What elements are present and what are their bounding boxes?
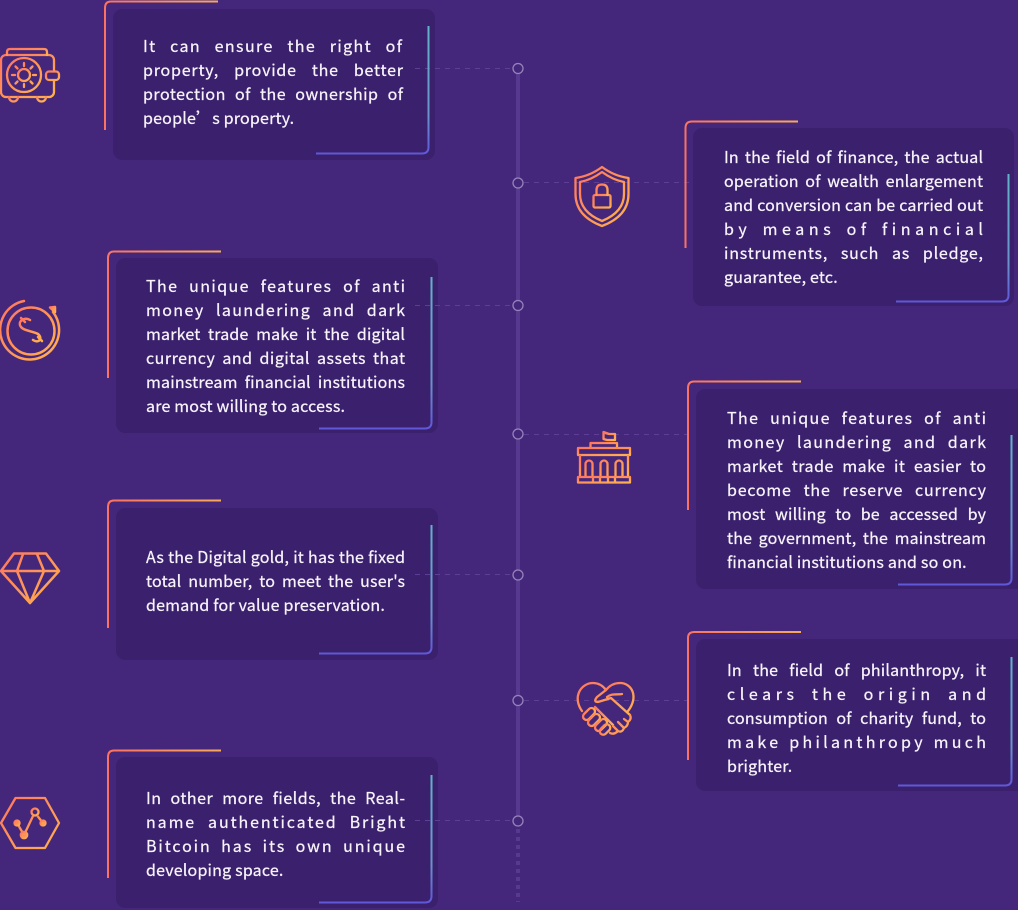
text: property rights: property, provide the better	[143, 57, 404, 81]
text: philanthropy: brighter.	[727, 753, 792, 777]
text: reserve currency: become the reserve currency	[727, 477, 987, 501]
text: reserve currency: market trade make it easier to	[727, 453, 986, 477]
text: finance: guarantee, etc.	[724, 264, 838, 288]
frame: other fields	[108, 750, 432, 902]
text: anti money laundering: currency and digital assets that	[146, 345, 406, 369]
text: anti money laundering	[146, 273, 406, 417]
panel: anti money laundering	[116, 258, 438, 433]
text: philanthropy	[727, 657, 991, 777]
icon: hexagon chart	[1, 798, 59, 848]
text: finance: and conversion can be carried out	[724, 192, 983, 216]
text: anti money laundering: market trade make it the digital	[146, 321, 405, 345]
text: other fields	[146, 785, 407, 881]
text: property rights: It can ensure the right of	[143, 33, 403, 57]
text: philanthropy: In the field of philanthropy, it	[727, 657, 986, 681]
text: digital gold: total number, to meet the user's	[146, 568, 405, 592]
text: finance: by means of financial	[724, 216, 988, 240]
text: digital gold: demand for value preservation.	[146, 592, 385, 616]
frame: anti money laundering	[108, 252, 432, 428]
text: reserve currency	[727, 405, 987, 573]
text: digital gold	[146, 544, 405, 616]
icon: dollar cycle	[0, 301, 59, 359]
text: finance: instruments, such as pledge,	[724, 240, 984, 264]
icon: diamond	[1, 554, 59, 603]
frame: finance	[686, 122, 1008, 302]
frame: reserve currency	[688, 382, 1012, 584]
text: philanthropy: make philanthropy much	[727, 729, 989, 753]
text: other fields: developing space.	[146, 857, 284, 881]
text: finance: operation of wealth enlargement	[724, 168, 983, 192]
text: finance: In the field of finance, the actual	[724, 144, 983, 168]
icon: shield lock	[576, 167, 628, 226]
frame: digital gold	[108, 500, 432, 654]
text: reserve currency: The unique features of anti	[727, 405, 987, 429]
text: anti money laundering: money laundering and dark	[146, 297, 406, 321]
text: other fields: name authenticated Bright	[146, 809, 407, 833]
icon: government building	[578, 430, 630, 482]
icon: handshake heart	[578, 683, 633, 736]
text: property rights: people’s property.	[143, 105, 294, 129]
text: reserve currency: most willing to be accessed by	[727, 501, 986, 525]
text: other fields: Bitcoin has its own unique	[146, 833, 407, 857]
panel: other fields	[116, 757, 438, 908]
text: reserve currency: financial institutions and so on.	[727, 549, 967, 573]
icon: safe	[1, 49, 59, 102]
panel: property rights	[113, 9, 435, 160]
frame: property rights	[105, 2, 428, 154]
text: reserve currency: money laundering and dark	[727, 429, 987, 453]
text: anti money laundering: The unique features of anti	[146, 273, 406, 297]
panel: finance	[693, 128, 1014, 306]
text: philanthropy: clears the origin and	[727, 681, 991, 705]
text: other fields: In other more fields, the Real-	[146, 785, 406, 809]
text: property rights	[143, 33, 404, 129]
panel: reserve currency	[696, 389, 1018, 589]
timeline	[415, 64, 692, 902]
text: anti money laundering: are most willing to access.	[146, 393, 345, 417]
text: finance	[724, 144, 988, 288]
frame: philanthropy	[688, 632, 1012, 786]
text: property rights: protection of the ownership of	[143, 81, 404, 105]
panel: digital gold	[116, 508, 438, 660]
panel: philanthropy	[696, 639, 1018, 791]
text: anti money laundering: mainstream financial institutions	[146, 369, 405, 393]
text: digital gold: As the Digital gold, it has the fixed	[146, 544, 405, 568]
text: reserve currency: the government, the mainstream	[727, 525, 986, 549]
text: philanthropy: consumption of charity fund, to	[727, 705, 986, 729]
